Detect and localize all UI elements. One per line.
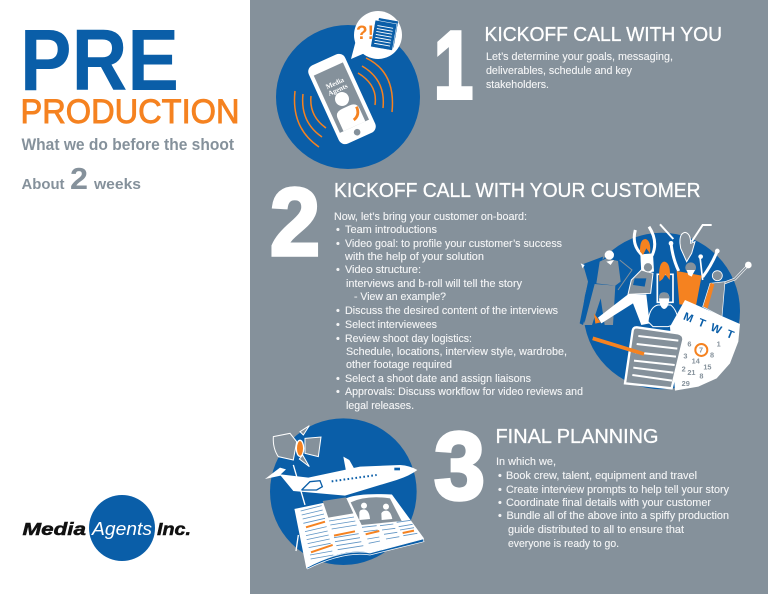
text: step 3 body: • [498, 497, 502, 509]
text: step 2 body: • [336, 373, 340, 385]
text: step 2 body: • [336, 319, 340, 331]
heading: step 3: FINAL PLANNING [496, 426, 658, 448]
icon: studio light [273, 426, 321, 551]
text: step 1 body: deliverables, schedule and key [486, 65, 632, 77]
duration [22, 161, 141, 196]
icon: production guide [265, 418, 424, 569]
logo: Media Agents Inc.: Media [22, 519, 86, 539]
text: step 1 body [486, 51, 673, 91]
figure: man at back with raised arms [660, 224, 712, 262]
icon: calendar: 8 [699, 371, 703, 380]
icon: notepad [625, 327, 683, 388]
duration: 2 [70, 161, 88, 196]
text: step 2 body: - View an example? [354, 291, 446, 303]
icon: calendar: 15 [703, 362, 711, 371]
number 2: 2 [270, 169, 320, 276]
figure: jumping woman [594, 263, 653, 325]
icon: open book [295, 495, 424, 569]
icon: calendar: 2 [682, 365, 686, 374]
subtitle: What we do before the shoot [22, 136, 234, 154]
icon: calendar: 29 [682, 379, 690, 388]
text: step 2 body: Discuss the desired content of the interviews [345, 305, 558, 317]
text: step 3 body: • [498, 470, 502, 482]
icon: airplane [265, 457, 417, 496]
logo: Media Agents Inc.: Agents [91, 519, 152, 539]
icon: calendar: 21 [687, 368, 695, 377]
text: step 3 body: Book crew, talent, equipment and travel [506, 470, 697, 482]
text: step 2 body: Review shoot day logistics: [345, 333, 472, 345]
figure: right man with tie [698, 254, 752, 317]
text: step 1 body: stakeholders. [486, 79, 549, 91]
icon: sound waves [294, 58, 392, 147]
text: step 2 body: Video goal: to profile your customer’s success [345, 238, 562, 250]
duration: About [22, 177, 65, 193]
number 3: 3 [434, 413, 485, 520]
text: step 2 body: other footage required [346, 359, 452, 371]
icon: calendar: M T W T [681, 311, 735, 342]
text: step 2 body [334, 211, 583, 412]
text: step 3 body: guide distributed to all to ensure that [508, 524, 684, 536]
text: step 2 body: Select interviewees [345, 319, 437, 331]
text: step 2 body: • [336, 305, 340, 317]
text: step 3 body [496, 456, 729, 550]
text: step 2 body: • [336, 264, 340, 276]
text: step 3 body: everyone is ready to go. [508, 538, 619, 550]
text: step 1 body: Let’s determine your goals, messaging, [486, 51, 673, 63]
text: step 3 body: Bundle all of the above into a spiffy production [506, 510, 729, 522]
figure: center woman with orange hair [657, 262, 673, 302]
logo: Media Agents Inc.: Inc. [157, 519, 191, 539]
text: step 2 body: • [336, 386, 340, 398]
icon: calendar: 1 [717, 340, 721, 349]
duration: weeks [93, 177, 141, 193]
text: step 2 body: Team introductions [345, 224, 437, 236]
heading: step 2: KICKOFF CALL WITH YOUR CUSTOMER [334, 180, 700, 202]
icon: speech bubble: ?! [356, 23, 374, 44]
text: step 2 body: with the help of your solution [344, 251, 484, 263]
text: step 2 body: Select a shoot date and assign liaisons [345, 373, 531, 385]
figure: left man [580, 250, 632, 325]
icon: team and schedule [580, 224, 752, 391]
text: step 3 body: In which we, [496, 456, 556, 468]
text: step 2 body: • [336, 224, 340, 236]
figure: woman with orange hair and raised arms [634, 227, 655, 273]
icon: calendar: 8 [710, 350, 714, 359]
icon: speech bubble [351, 11, 402, 59]
icon: calendar: 6 [687, 340, 691, 349]
icon: calendar: 3 [683, 351, 687, 360]
icon: calendar: 14 [692, 356, 701, 365]
text: step 2 body: Approvals: Discuss workflow for video reviews and [345, 386, 583, 398]
text: step 2 body: interviews and b-roll will tell the story [346, 278, 522, 290]
icon: pencil [593, 338, 644, 354]
icon: calendar: 7 [699, 346, 703, 355]
text: step 2 body: Now, let’s bring your customer on-board: [334, 211, 527, 223]
text: step 2 body: Video structure: [345, 264, 421, 276]
icon: calendar [670, 300, 740, 391]
text: step 3 body: • [498, 484, 502, 496]
icon: smartphone [306, 52, 378, 146]
icon: smartphone: Media [325, 76, 346, 91]
icon: smartphone: Agents [327, 82, 349, 98]
text: step 3 body: • [498, 510, 502, 522]
icon: phone call [276, 11, 420, 169]
number 1: 1 [434, 12, 473, 119]
text: step 3 body: Coordinate final details with your customer [506, 497, 711, 509]
logo: Media Agents Inc. [22, 495, 191, 561]
text: step 2 body: • [336, 238, 340, 250]
figure: cheering man in orange [669, 241, 720, 306]
figure: seated man [648, 292, 679, 327]
title: PRODUCTION: PRODUCTION [20, 93, 240, 131]
heading: step 1: KICKOFF CALL WITH YOU [484, 24, 722, 46]
text: step 2 body: Schedule, locations, interview style, wardrobe, [346, 346, 567, 358]
text: step 2 body: legal releases. [346, 400, 414, 412]
title: PRE: PRE [20, 12, 179, 109]
text: step 3 body: Create interview prompts to help tell your story [506, 484, 729, 496]
panel: grey content background [250, 0, 768, 594]
text: step 2 body: • [336, 333, 340, 345]
